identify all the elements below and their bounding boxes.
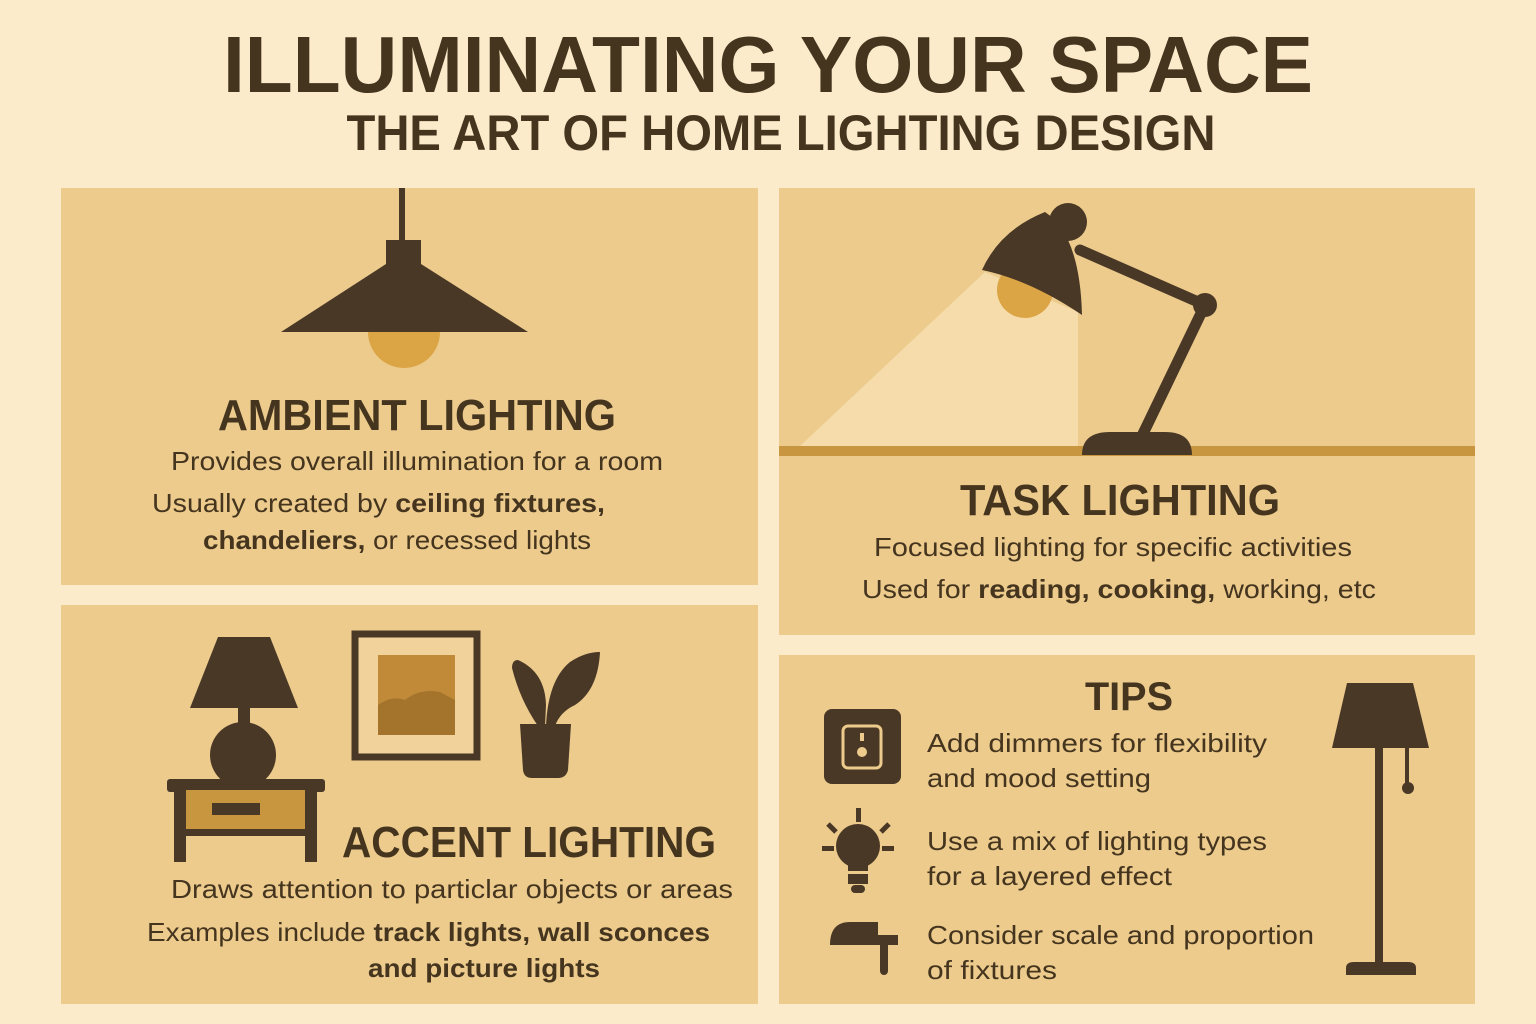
- text: tips list: of fixtures: [927, 955, 1057, 985]
- text: accent description: Examples include track lights, wall sconces: [147, 917, 710, 947]
- heading: tips: TIPS: [1085, 675, 1173, 719]
- text: accent description: Draws attention to particlar objects or areas: [171, 874, 733, 904]
- text: task description: Focused lighting for specific activities: [874, 532, 1352, 562]
- heading: task: TASK LIGHTING: [960, 476, 1280, 525]
- panel: task lighting: [779, 188, 1475, 635]
- text: ambient description: chandeliers, or recessed lights: [203, 525, 591, 555]
- heading: accent: ACCENT LIGHTING: [342, 818, 716, 867]
- text: accent description: [147, 874, 733, 983]
- text: ambient description: Usually created by ceiling fixtures,: [152, 488, 605, 518]
- title: ILLUMINATING YOUR SPACE: [223, 20, 1313, 109]
- text: ambient description: Provides overall illumination for a room: [171, 446, 663, 476]
- icon: picture frame: [355, 634, 477, 757]
- heading: ambient: AMBIENT LIGHTING: [218, 391, 616, 440]
- text: task description: [862, 532, 1376, 604]
- text: tips list: Add dimmers for flexibility: [927, 728, 1267, 758]
- subtitle: THE ART OF HOME LIGHTING DESIGN: [346, 105, 1216, 161]
- text: tips list: for a layered effect: [927, 861, 1173, 891]
- icon: table lamp on nightstand: [167, 637, 325, 862]
- text: tips list: Use a mix of lighting types: [927, 826, 1267, 856]
- icon: light bulb: [822, 808, 894, 893]
- panel: accent lighting: [61, 605, 758, 1004]
- light beam: [800, 272, 1078, 446]
- table surface: [779, 446, 1475, 456]
- panel: ambient lighting: [61, 188, 758, 585]
- text: task description: Used for reading, cooking, working, etc: [862, 574, 1376, 604]
- icon: dimmer switch: [824, 709, 901, 784]
- text: accent description: and picture lights: [368, 953, 600, 983]
- text: tips list: Consider scale and proportion: [927, 920, 1314, 950]
- icon: wall sconce: [830, 922, 898, 975]
- panel: tips: [779, 655, 1475, 1004]
- text: ambient description: [152, 446, 663, 555]
- text: tips list: [927, 728, 1314, 985]
- icon: pendant lamp: [281, 188, 528, 368]
- icon: floor lamp: [1332, 683, 1429, 975]
- icon: potted plant: [512, 652, 600, 778]
- icon: desk lamp: [982, 203, 1217, 455]
- text: tips list: and mood setting: [927, 763, 1151, 793]
